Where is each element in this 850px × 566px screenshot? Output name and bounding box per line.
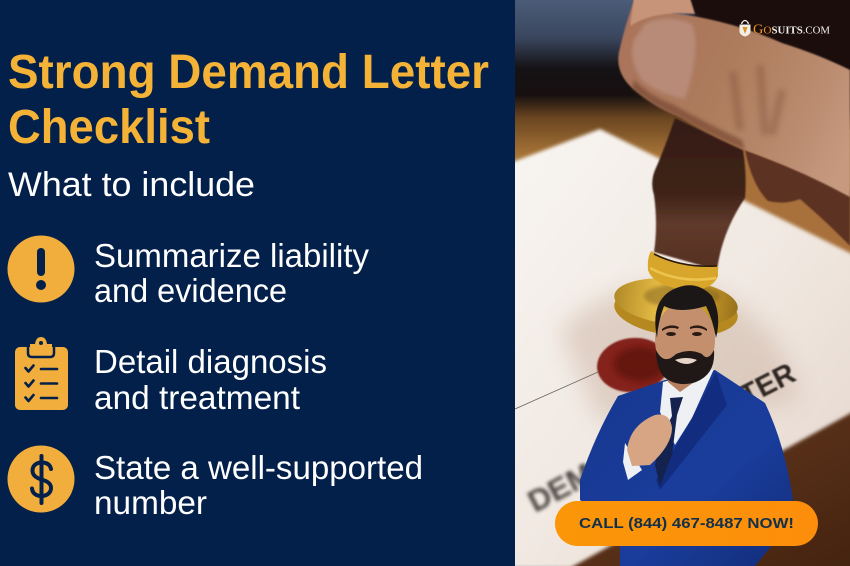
title: Strong Demand Letter xyxy=(8,46,489,99)
beard xyxy=(656,350,714,384)
icon: exclamation mark xyxy=(8,236,74,302)
thumbnail xyxy=(632,18,696,99)
red wax seal xyxy=(596,336,665,393)
item text: Summarize liability xyxy=(94,237,369,274)
wooden handle xyxy=(652,118,746,270)
icon: dollar sign xyxy=(8,446,74,512)
checklist item: supported number xyxy=(8,446,423,521)
call to action button xyxy=(555,501,818,546)
gosuits logo: GOSUITS.COM xyxy=(753,22,831,38)
item text xyxy=(94,449,423,521)
photo panel: hand pressing wax seal on letter xyxy=(505,0,850,566)
item text: Detail diagnosis xyxy=(94,343,327,380)
thumb shadow xyxy=(632,80,745,150)
lapel shadow xyxy=(656,372,727,490)
smile xyxy=(675,358,697,364)
hair xyxy=(655,285,718,338)
tie xyxy=(655,397,683,486)
icon: clipboard xyxy=(15,337,68,410)
blurred background xyxy=(515,0,850,300)
left navy panel xyxy=(0,0,515,566)
shirt cuff xyxy=(623,443,642,480)
hand on tie xyxy=(627,415,672,466)
stamp collar xyxy=(648,251,718,290)
call to action button: CALL (844) 467-8487 NOW! xyxy=(579,516,794,532)
shirt collar xyxy=(660,369,714,445)
item text xyxy=(94,237,369,309)
item text xyxy=(94,343,327,416)
eyes xyxy=(662,325,707,336)
checklist item: diagnosis and treatment xyxy=(15,337,327,416)
letter paper xyxy=(505,129,850,566)
checklist item: liability and evidence xyxy=(8,236,369,309)
letter paper: TER xyxy=(735,357,801,412)
item text: and treatment xyxy=(94,379,300,416)
title: Checklist xyxy=(8,101,210,154)
item text: number xyxy=(94,484,207,521)
fold line xyxy=(515,372,598,409)
face xyxy=(655,308,715,360)
neck xyxy=(668,380,694,392)
subtitle: What to include xyxy=(8,166,255,204)
blurred letter heading: DEM xyxy=(522,456,599,519)
brass stamp base xyxy=(614,278,738,334)
item text: and evidence xyxy=(94,272,287,309)
suit xyxy=(580,370,793,566)
icon: lock shield xyxy=(740,20,750,36)
title xyxy=(8,46,489,154)
item text: State a well-supported xyxy=(94,449,423,486)
attorney portrait xyxy=(580,285,793,566)
wood table xyxy=(558,411,850,566)
hand xyxy=(618,0,850,246)
